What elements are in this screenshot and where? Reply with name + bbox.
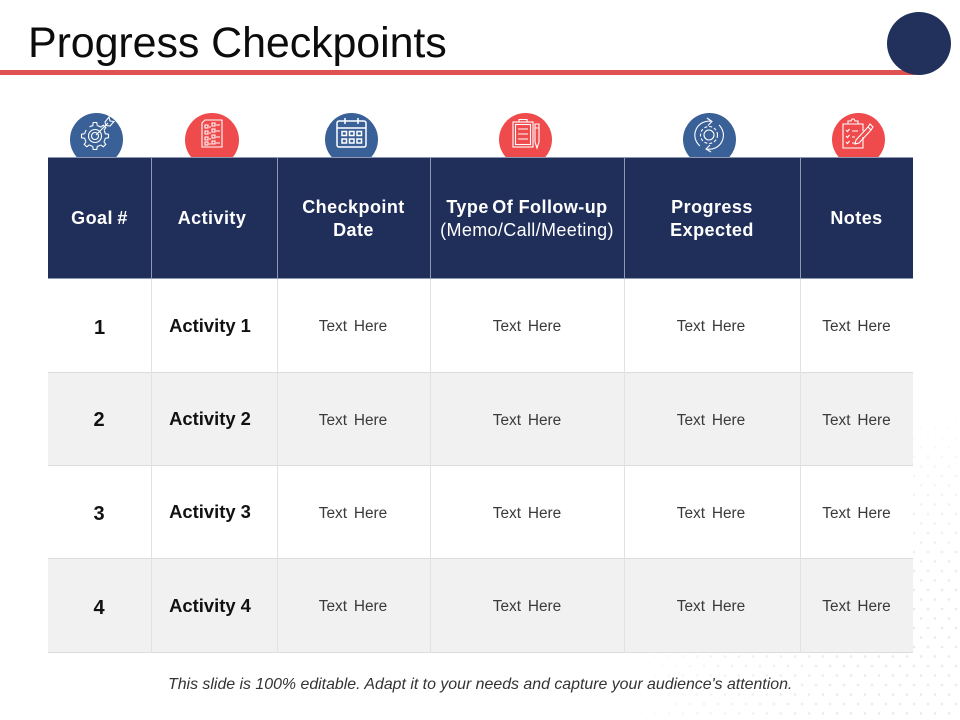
title: Progress Checkpoints (28, 19, 447, 67)
icon: refresh gear (683, 113, 736, 157)
row 1: Text Here (319, 318, 387, 335)
footer note: This slide is 100% editable. Adapt it to your needs and capture your audience's attention. (168, 676, 792, 693)
corner circle (887, 12, 951, 75)
row 3: 3 (93, 503, 105, 525)
icon: clipboard and pen (499, 113, 552, 157)
row 2: Text Here (319, 412, 387, 428)
title underline (0, 70, 915, 75)
row 3: Text Here (822, 504, 891, 522)
row 1: Text Here (822, 318, 891, 335)
row 4: Text Here (493, 598, 561, 615)
header: Progress Expected: Expected (670, 220, 754, 240)
row 2: Text Here (822, 412, 891, 428)
row 4: 4 (93, 596, 105, 618)
row 2: Activity 2 (169, 408, 251, 428)
row 4: Activity 4 (169, 595, 251, 616)
header: Progress Expected (670, 196, 754, 240)
icon: gear and target (70, 113, 123, 157)
icon: calendar (325, 113, 378, 157)
header: Progress Expected: Progress (671, 196, 753, 216)
row 1: Activity 1 (169, 315, 251, 336)
header: Checkpoint Date: Date (333, 220, 374, 240)
row 4: Text Here (677, 598, 745, 615)
table header row (48, 157, 913, 279)
header: Type Of Follow-up: Type Of Follow-up (446, 196, 608, 216)
row 3: Activity 3 (169, 500, 251, 522)
row 1: Text Here (493, 318, 561, 335)
icon: checklist (185, 113, 239, 157)
header: Notes: Notes (830, 208, 883, 228)
header: Goal #: Goal # (71, 208, 128, 228)
header: Activity: Activity (178, 208, 246, 228)
row 1: 1 (94, 316, 105, 338)
row 3: Text Here (677, 504, 745, 522)
row 2: Text Here (677, 412, 745, 428)
header: Type Of Follow-up: (Memo/Call/Meeting) (440, 220, 614, 240)
header: Checkpoint Date (302, 196, 405, 240)
halftone dot background (689, 466, 958, 715)
row 3: Text Here (493, 504, 561, 522)
row 2: Text Here (493, 412, 561, 428)
header: Checkpoint Date: Checkpoint (302, 196, 405, 216)
row 3 (93, 500, 891, 525)
row 4 (93, 595, 891, 618)
row 4: Text Here (319, 598, 387, 615)
row 2 (93, 408, 891, 431)
row 3: Text Here (319, 504, 387, 522)
row 1 (94, 315, 891, 338)
row 2: 2 (93, 409, 105, 431)
row 4: Text Here (822, 598, 891, 615)
icon: checklist clipboard and pencil (832, 113, 885, 157)
header: Type Of Follow-up (440, 196, 614, 240)
row 1: Text Here (677, 318, 745, 335)
